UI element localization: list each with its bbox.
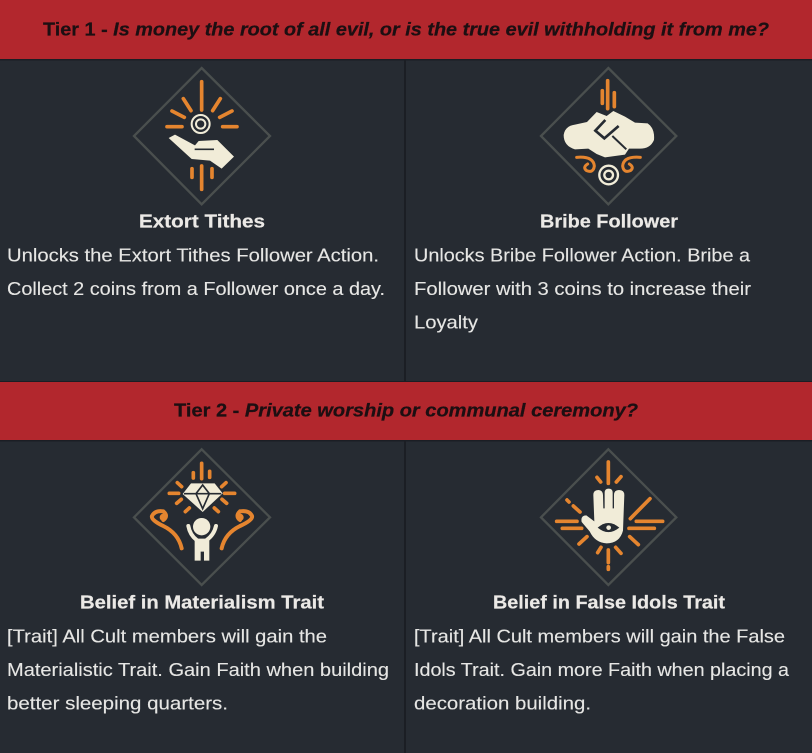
description: Idols Trait. Gain more Faith when placing a: [414, 659, 790, 680]
heading: Extort Tithes: [139, 212, 265, 232]
tier 2 header: Tier 2 - Private worship or communal ceremony?: [174, 400, 638, 420]
description: Collect 2 coins from a Follower once a day.: [7, 278, 385, 299]
description: [7, 626, 389, 714]
description: Unlocks the Extort Tithes Follower Action.: [7, 244, 379, 266]
panel: Belief in Materialism Trait: [7, 449, 389, 714]
panel: Bribe Follower: [414, 68, 751, 332]
description: decoration building.: [414, 692, 591, 714]
panel: Extort Tithes: [7, 68, 385, 299]
description: better sleeping quarters.: [7, 692, 228, 714]
tier 1 header: [0, 0, 812, 60]
description: Follower with 3 coins to increase their: [414, 278, 751, 299]
icon: diamond and worshipper: [134, 449, 270, 585]
description: Materialistic Trait. Gain Faith when building: [7, 659, 389, 680]
icon: hand with coin: [134, 68, 270, 204]
heading: Belief in Materialism Trait: [80, 592, 324, 612]
description: [414, 244, 751, 332]
heading: Bribe Follower: [540, 212, 678, 232]
description: Loyalty: [414, 312, 479, 332]
icon: hand with eye: [541, 449, 676, 585]
description: [7, 244, 385, 299]
heading: Belief in False Idols Trait: [493, 592, 725, 612]
panel: Belief in False Idols Trait: [414, 449, 790, 714]
description: Unlocks Bribe Follower Action. Bribe a: [414, 244, 751, 266]
description: [Trait] All Cult members will gain the: [7, 626, 327, 646]
description: [Trait] All Cult members will gain the False: [414, 626, 785, 646]
description: [414, 626, 790, 714]
icon: handshake: [541, 68, 676, 204]
tier 1 header: Tier 1 - Is money the root of all evil, or is the true evil withholding it from me?: [43, 20, 769, 40]
tier 2 header: [0, 381, 812, 442]
